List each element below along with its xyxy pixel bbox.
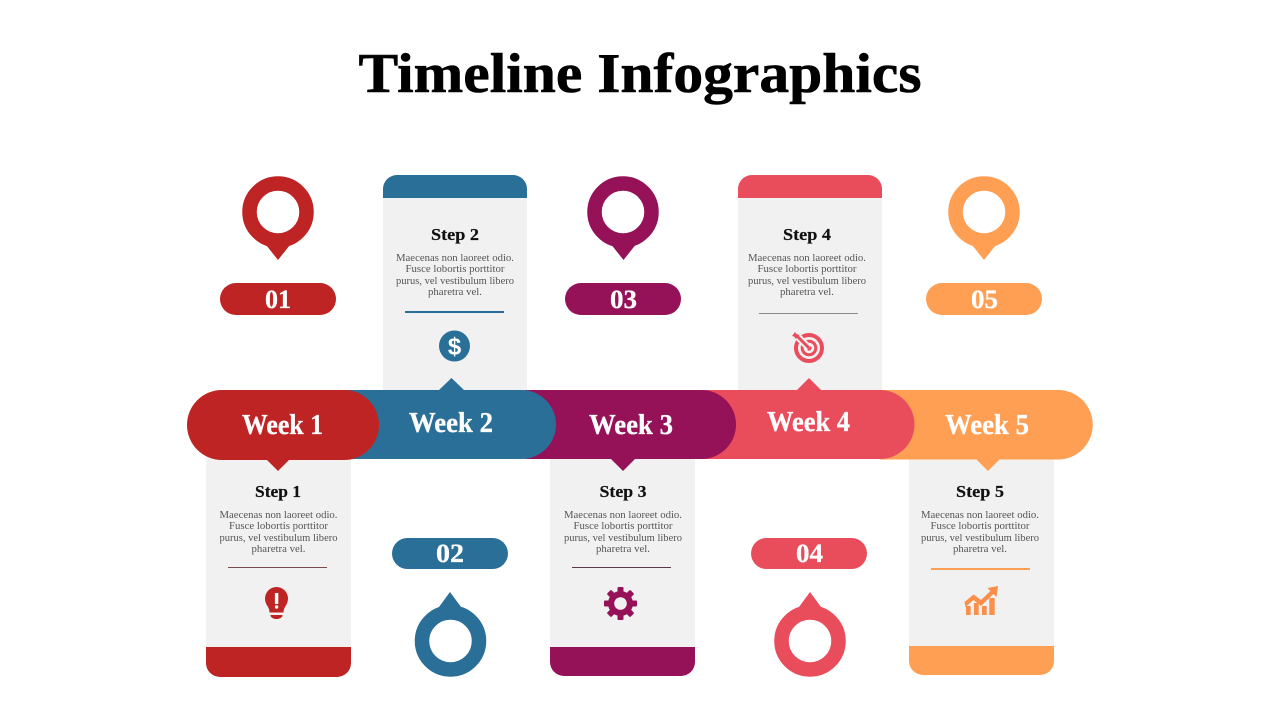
- title: Timeline Infographics: [358, 43, 922, 105]
- panel: step 1 card: Step 1: [255, 482, 301, 501]
- panel: step 5 card: [909, 455, 1054, 675]
- icon: target: [792, 332, 822, 361]
- panel: step 1 card: Fusce lobortis porttitor: [229, 521, 329, 532]
- panel: step 5 card: Maecenas non laoreet odio.: [921, 510, 1039, 521]
- panel: step 4 card: [738, 175, 882, 393]
- panel: step 1 card: purus, vel vestibulum libero: [220, 533, 338, 544]
- panel: step 4 card: Fusce lobortis porttitor: [758, 264, 857, 275]
- panel: step 3 card: purus, vel vestibulum libero: [564, 533, 682, 544]
- panel: week 1 bar: [187, 390, 379, 471]
- panel: step 3 card: [550, 455, 695, 676]
- panel: step 2 card: Maecenas non laoreet odio.: [396, 253, 514, 264]
- panel: week 5 bar: Week 5: [945, 410, 1029, 441]
- number pill 04: [751, 538, 867, 569]
- icon: light bulb: [265, 587, 288, 619]
- icon: pin 02: [422, 592, 479, 670]
- panel: week 2 bar: Week 2: [409, 408, 493, 439]
- number pill 05: 05: [971, 285, 998, 314]
- panel: week 2 bar: [345, 378, 556, 459]
- number pill 03: 03: [610, 285, 637, 314]
- number pill 03: [565, 283, 681, 315]
- number pill 02: 02: [436, 539, 464, 568]
- panel: step 1 card: Maecenas non laoreet odio.: [220, 510, 338, 521]
- panel: step 5 card: pharetra vel.: [953, 544, 1007, 555]
- number pill 02: [392, 538, 508, 569]
- panel: step 3 card: pharetra vel.: [596, 544, 650, 555]
- panel: step 3 card: Step 3: [600, 482, 646, 501]
- panel: step 5 card: purus, vel vestibulum libero: [921, 533, 1039, 544]
- panel: week 5 bar: [880, 390, 1093, 471]
- panel: step 1 card: pharetra vel.: [252, 544, 306, 555]
- panel: step 3 card: Maecenas non laoreet odio.: [564, 510, 682, 521]
- number pill 01: 01: [265, 285, 291, 314]
- icon: pin 03: [594, 184, 652, 260]
- panel: step 4 card: Step 4: [783, 225, 832, 244]
- icon: growth chart: [964, 586, 998, 615]
- icon: dollar coin: $: [448, 334, 462, 360]
- panel: week 3 bar: [525, 390, 736, 471]
- panel: step 4 card: pharetra vel.: [780, 287, 834, 298]
- panel: step 1 card: [206, 455, 351, 677]
- number pill 04: 04: [796, 539, 823, 568]
- panel: step 4 card: Maecenas non laoreet odio.: [748, 253, 866, 264]
- number pill 01: [220, 283, 336, 315]
- icon: dollar coin: [439, 330, 470, 362]
- panel: step 4 card: purus, vel vestibulum libero: [748, 276, 866, 287]
- panel: step 5 card: Step 5: [956, 482, 1004, 501]
- panel: week 1 bar: Week 1: [242, 410, 323, 441]
- panel: step 2 card: pharetra vel.: [428, 287, 482, 298]
- panel: step 3 card: Fusce lobortis porttitor: [574, 521, 673, 532]
- panel: step 5 card: Fusce lobortis porttitor: [930, 521, 1030, 532]
- panel: step 2 card: [383, 175, 527, 393]
- number pill 05: [926, 283, 1042, 315]
- icon: pin 05: [956, 184, 1012, 260]
- icon: pin 04: [782, 592, 838, 670]
- panel: step 2 card: Fusce lobortis porttitor: [406, 264, 505, 275]
- panel: step 2 card: Step 2: [431, 225, 479, 244]
- panel: step 2 card: purus, vel vestibulum libero: [396, 276, 514, 287]
- panel: week 3 bar: Week 3: [589, 410, 673, 441]
- icon: pin 01: [250, 184, 306, 260]
- icon: gear: [604, 587, 637, 620]
- panel: week 4 bar: Week 4: [767, 407, 850, 438]
- panel: week 4 bar: [700, 378, 914, 459]
